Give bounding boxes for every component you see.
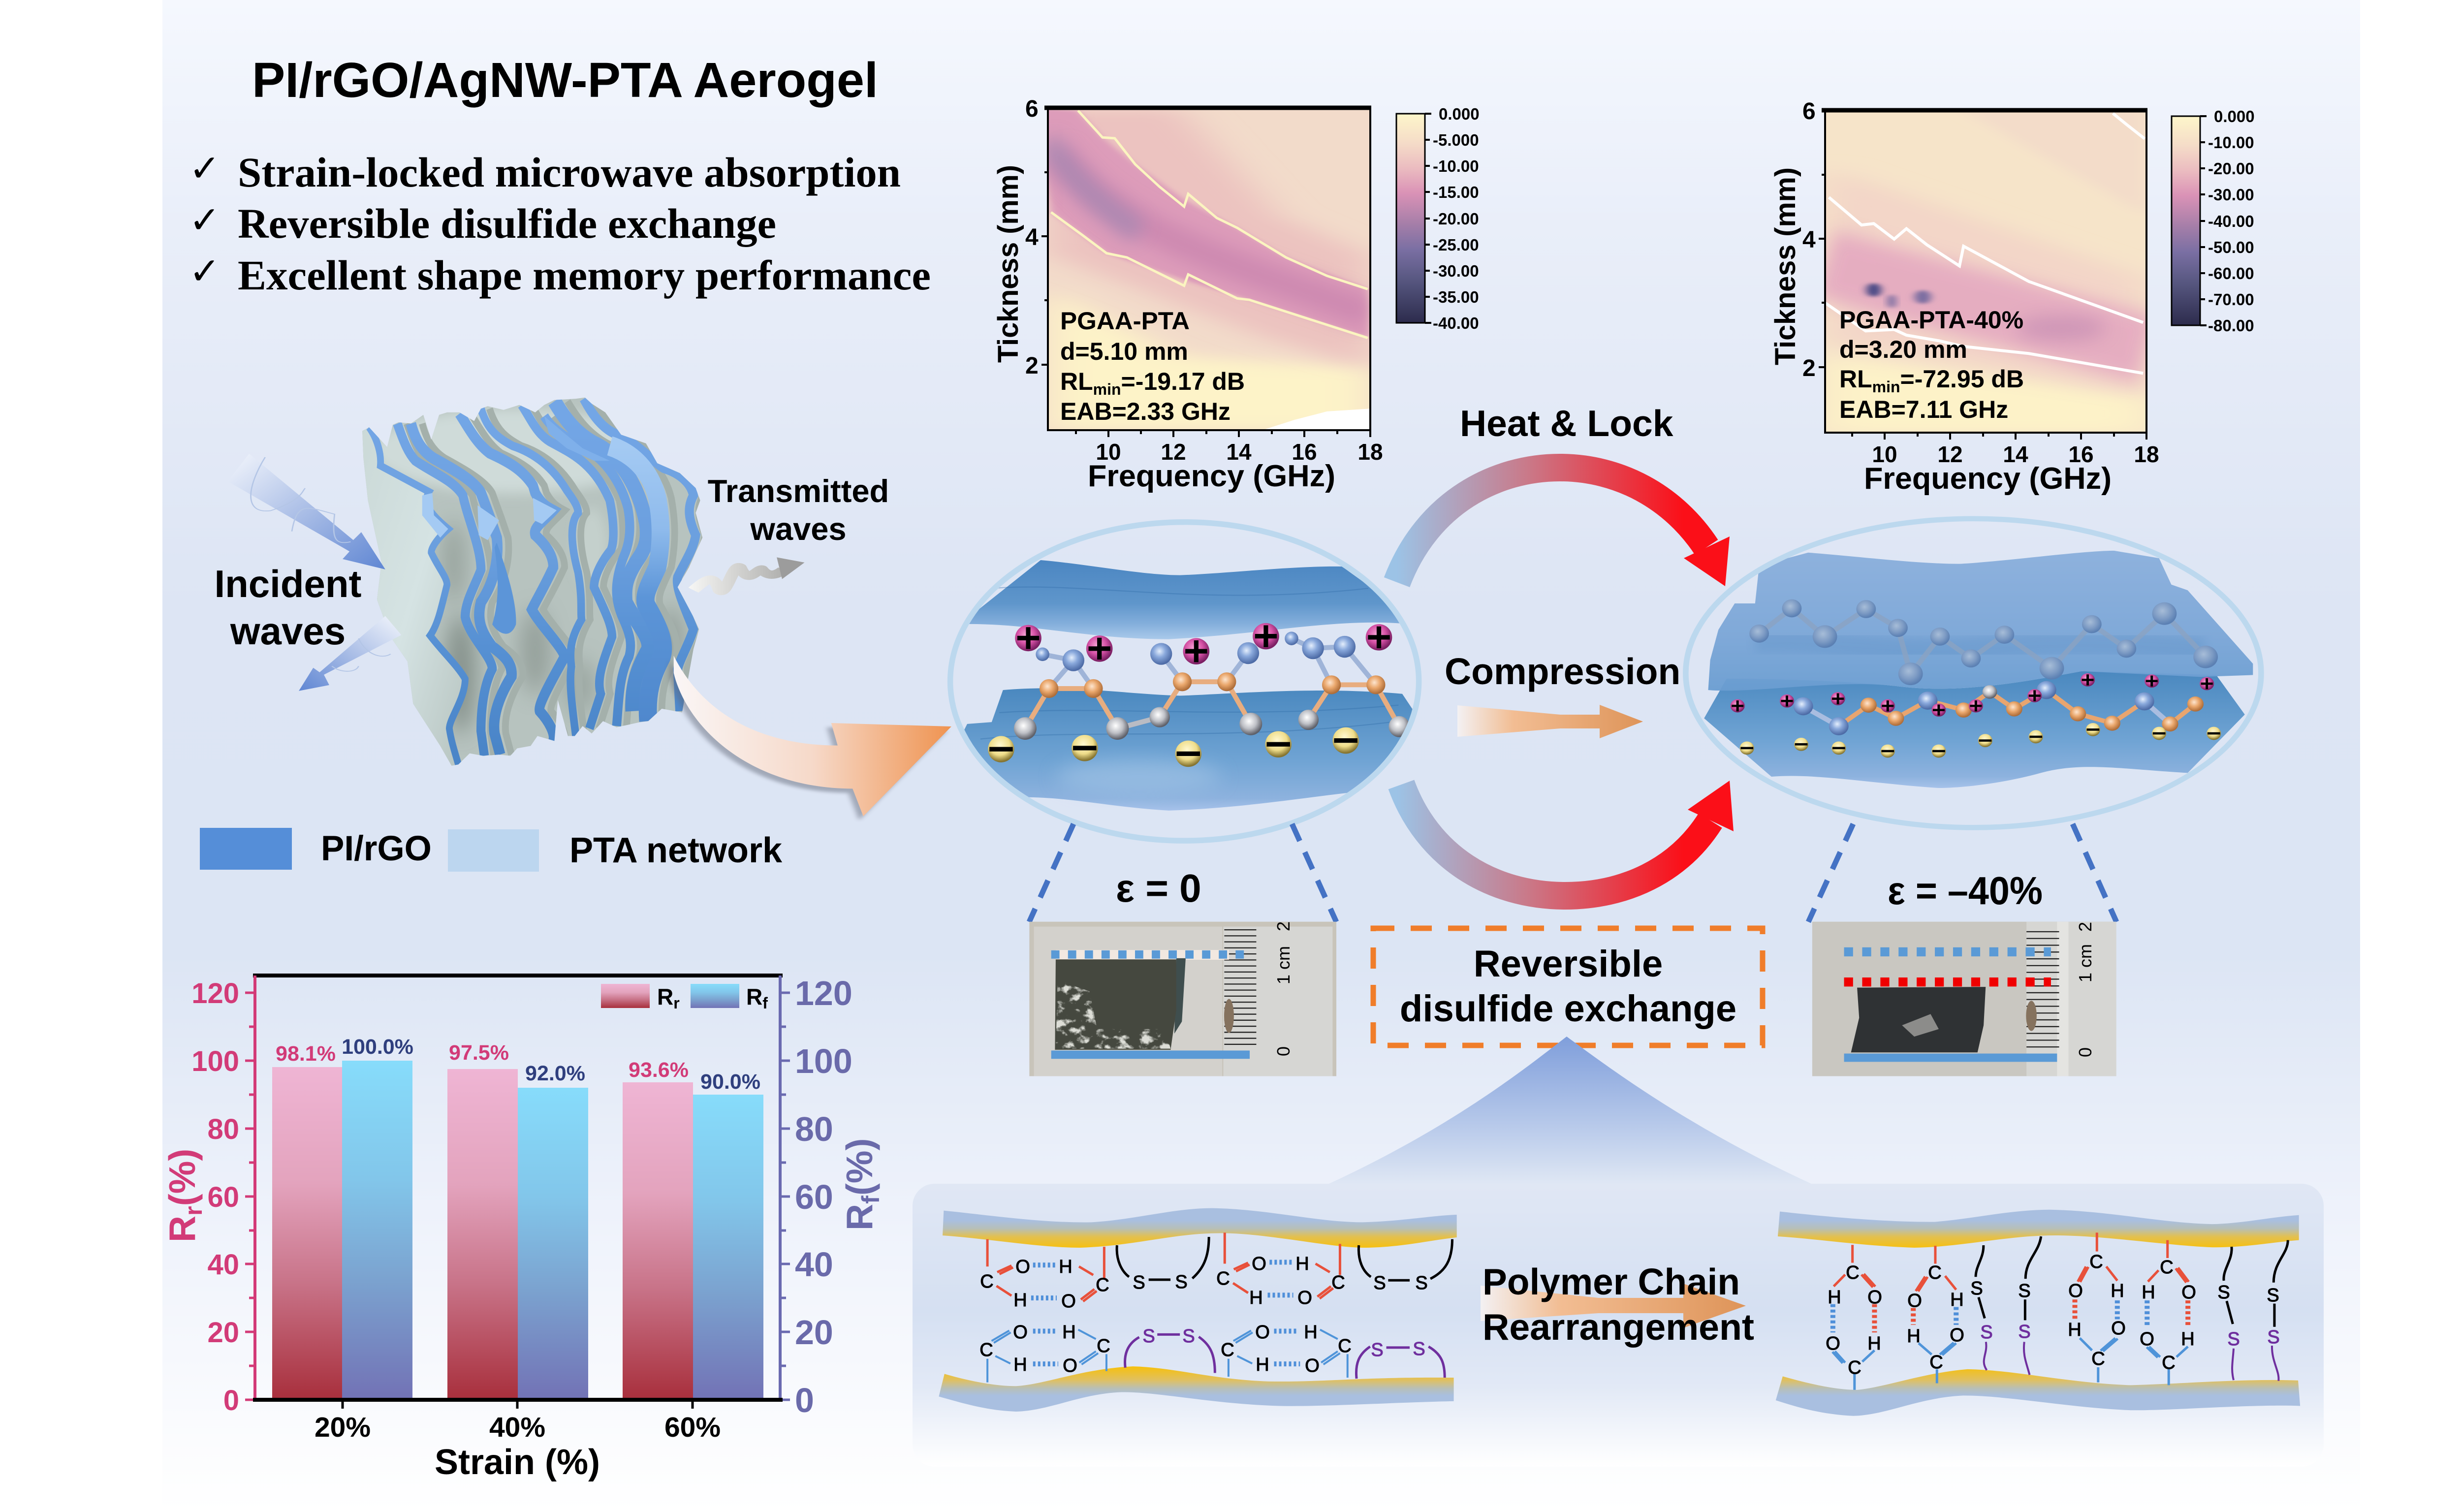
polymer chain: [1025, 638, 1399, 728]
value labels: 100.0%: [342, 1035, 413, 1059]
colorbar: -70.00: [2208, 290, 2254, 309]
heatmap plot area: [1825, 111, 2146, 433]
heatmap frame and ticks: [1819, 110, 2147, 440]
legend: [200, 828, 783, 872]
atom labels: S: [1133, 1272, 1145, 1293]
heatmap x tick labels: 12: [1937, 441, 1963, 467]
atom labels: O: [2140, 1329, 2154, 1350]
heatmap: PGAA-PTA: [992, 96, 1480, 493]
atom labels: S: [1373, 1273, 1386, 1293]
heatmap annotation: RL: [1839, 365, 1872, 393]
heatmap x tick labels: 10: [1096, 439, 1121, 465]
atom labels: H: [1828, 1287, 1841, 1308]
colorbar: -10.00: [1433, 157, 1479, 175]
right axis title: [839, 1138, 884, 1230]
fan connector: [1329, 1037, 1811, 1184]
bullet: reversible disulfide exchange: Reversible disulfide exchange: [238, 200, 776, 247]
value labels: [276, 1035, 760, 1094]
heatmap annotation: =-19.17 dB: [1121, 368, 1245, 395]
colorbar: -50.00: [2208, 238, 2254, 256]
right axis title: R: [839, 1204, 880, 1230]
axes: [245, 976, 790, 1409]
label: incident waves: waves: [230, 609, 346, 653]
atom labels: C: [2162, 1353, 2176, 1373]
atom labels: [1826, 1252, 2280, 1378]
label: transmitted waves: waves: [750, 511, 847, 547]
callout: reversible disulfide exchange: [1373, 928, 1763, 1045]
left schematic: hydrogen and disulfide bonds: [939, 1208, 1457, 1412]
bullet: excellent shape memory performance: ✓: [189, 249, 221, 293]
legend swatch: PTA network: [448, 829, 539, 872]
atom labels: C: [1846, 1262, 1860, 1283]
atom labels: C: [1096, 1275, 1109, 1295]
right axis labels: [795, 974, 852, 1419]
heatmap plot area: [1033, 108, 1370, 430]
atom labels: H: [2111, 1281, 2124, 1301]
callout: reversible disulfide exchange: Reversible: [1474, 943, 1663, 985]
atom labels: C: [2160, 1257, 2174, 1278]
ruler labels: 0: [2075, 1047, 2095, 1057]
negative charges: [988, 727, 1359, 767]
colorbar: -20.00: [1433, 210, 1479, 228]
atom labels: C: [1221, 1340, 1234, 1360]
colorbar: -30.00: [2208, 186, 2254, 204]
left axis labels: 120: [191, 977, 239, 1009]
ruler labels: 1 cm: [1273, 946, 1294, 984]
lower polymer chain: [1794, 681, 2204, 735]
label: incident waves: Incident: [214, 562, 362, 605]
atom labels: C: [980, 1271, 994, 1292]
heatmap annotation: [1839, 306, 2024, 423]
left axis title: (%): [161, 1149, 203, 1206]
heatmap frame and ticks: [1041, 108, 1371, 437]
zoom view: compressed state: [1686, 519, 2261, 827]
colorbar: -15.00: [1433, 183, 1479, 201]
atom labels: O: [1013, 1322, 1028, 1343]
left axis labels: 0: [223, 1385, 239, 1417]
negative charges: [1740, 723, 2221, 757]
x axis labels: 60%: [664, 1412, 721, 1443]
heatmap annotation: PGAA-PTA: [1060, 307, 1190, 335]
heatmap x tick labels: 16: [1292, 439, 1317, 465]
bullet: reversible disulfide exchange: ✓: [189, 198, 221, 242]
x axis title: Frequency (GHz): [1088, 459, 1335, 493]
colorbar: 0.000: [2214, 107, 2255, 126]
chart legend: f: [762, 994, 768, 1012]
x axis labels: [315, 1412, 721, 1443]
atom labels: S: [1175, 1272, 1188, 1292]
colorbar: -80.00: [2208, 316, 2254, 335]
reflected wave arrow: [299, 616, 401, 691]
right axis title: f: [857, 1196, 884, 1204]
left axis labels: 60: [207, 1181, 239, 1213]
chart legend: R: [657, 984, 673, 1009]
bullet: strain-locked microwave absorption: Strain-locked microwave absorption: [238, 149, 901, 196]
grey sheet edges: [407, 399, 705, 756]
arrow: recovery: [1401, 781, 1734, 896]
left axis labels: 80: [207, 1113, 239, 1145]
atom labels: S: [1980, 1322, 1993, 1343]
heatmap y tick labels: 2: [1025, 353, 1039, 379]
heatmap annotation: RL: [1060, 368, 1093, 395]
atom labels: O: [1305, 1355, 1320, 1376]
x axis title: Strain (%): [435, 1443, 600, 1482]
heatmap: PGAA-PTA-40%: [1769, 98, 2255, 496]
heatmap x tick labels: 12: [1161, 439, 1186, 465]
right axis labels: 100: [795, 1042, 852, 1080]
aerogel illustration: [354, 389, 716, 773]
heatmap annotation: EAB=2.33 GHz: [1060, 398, 1230, 425]
atom labels: C: [1097, 1336, 1110, 1356]
atom labels: S: [2227, 1329, 2240, 1350]
left axis title: [161, 1149, 207, 1242]
right axis labels: 120: [795, 974, 852, 1012]
atom labels: S: [1142, 1326, 1155, 1347]
heatmap y tick labels: 6: [1025, 96, 1039, 122]
legend label: PI/rGO: PI/rGO: [321, 829, 432, 868]
colorbar: 0.000: [1439, 105, 1480, 123]
atom labels: O: [1950, 1325, 1964, 1346]
label: polymer chain rearrangement: [1483, 1261, 1754, 1348]
right axis labels: 40: [795, 1245, 833, 1284]
label: polymer chain rearrangement: Polymer Chain: [1483, 1261, 1740, 1302]
bar chart: shape memory: [161, 974, 884, 1482]
atom labels: H: [2142, 1282, 2155, 1303]
atom labels: O: [2181, 1282, 2196, 1303]
atom labels: H: [1907, 1326, 1921, 1347]
ruler labels: [2075, 922, 2095, 1057]
colorbar: -60.00: [2208, 264, 2254, 283]
chart legend: R: [746, 984, 762, 1009]
bullet: excellent shape memory performance: Excellent shape memory performance: [238, 252, 931, 299]
atom labels: C: [1929, 1352, 1943, 1373]
value labels: 93.6%: [629, 1058, 689, 1082]
heatmap annotation: d=3.20 mm: [1839, 336, 1967, 363]
value labels: 97.5%: [449, 1041, 509, 1065]
label: heat and lock: Heat & Lock: [1460, 403, 1673, 444]
blue sheets: [397, 399, 695, 756]
positive charges: [1015, 623, 1392, 664]
atom labels: O: [1255, 1322, 1270, 1343]
heatmap y tick labels: 2: [1802, 355, 1816, 381]
title: PI/rGO/AgNW-PTA Aerogel: [252, 53, 878, 108]
photo: compressed sample: [1812, 922, 2116, 1076]
orange arrow to zoom view: [669, 656, 951, 820]
heatmap y tick labels: 4: [1802, 227, 1816, 253]
strain label: minus forty percent: ε = –40%: [1888, 869, 2043, 913]
atom labels: C: [2091, 1349, 2105, 1369]
x axis labels: 20%: [315, 1412, 371, 1443]
heatmap x tick labels: 18: [1357, 439, 1383, 465]
heatmap annotation: [1060, 307, 1245, 425]
left axis labels: 100: [191, 1045, 239, 1077]
heatmap y tick labels: [1025, 96, 1039, 379]
ruler labels: [1273, 921, 1294, 1056]
atom labels: H: [1950, 1290, 1964, 1310]
atom labels: S: [2267, 1285, 2279, 1306]
atom labels: C: [1928, 1262, 1942, 1283]
atom labels: S: [1371, 1340, 1384, 1360]
ruler labels: 2: [1273, 921, 1294, 931]
bars: 60 percent: [623, 1082, 763, 1400]
atom labels: S: [1182, 1326, 1195, 1347]
right axis labels: 20: [795, 1313, 833, 1352]
heatmap x tick labels: [1872, 441, 2159, 467]
atom labels: O: [1826, 1333, 1840, 1354]
colorbar: -30.00: [1433, 262, 1479, 280]
colorbar: [2172, 107, 2255, 335]
heatmap x tick labels: [1096, 439, 1383, 465]
legend label: PTA network: PTA network: [569, 831, 783, 870]
atom labels: H: [1256, 1354, 1269, 1375]
right axis labels: 80: [795, 1110, 833, 1148]
atom labels: S: [2267, 1327, 2280, 1348]
heatmap x tick labels: 14: [1226, 439, 1252, 465]
atom labels: H: [2181, 1329, 2195, 1350]
atom labels: O: [1061, 1291, 1076, 1312]
strain label: zero: ε = 0: [1116, 866, 1201, 910]
colorbar: -25.00: [1433, 236, 1479, 254]
colorbar: -5.000: [1433, 131, 1479, 149]
heatmap y tick labels: 6: [1802, 98, 1816, 125]
callout: reversible disulfide exchange: disulfide exchange: [1400, 988, 1736, 1030]
heatmap annotation: min: [1093, 380, 1121, 398]
bars: 40 percent: [447, 1069, 588, 1400]
label: transmitted waves: Transmitted: [708, 473, 889, 509]
colorbar: -40.00: [2208, 212, 2254, 230]
value labels: 98.1%: [276, 1042, 336, 1066]
left axis title: r: [180, 1206, 207, 1216]
atom labels: O: [1063, 1355, 1077, 1376]
bullet: strain-locked microwave absorption: ✓: [189, 146, 221, 190]
ruler labels: 0: [1273, 1046, 1294, 1056]
incident wave arrow: [228, 454, 385, 569]
atom labels: H: [1867, 1333, 1881, 1354]
left axis labels: 40: [207, 1249, 239, 1281]
heatmap x tick labels: 18: [2134, 441, 2159, 467]
left axis labels: [191, 977, 239, 1417]
atom labels: C: [1216, 1268, 1230, 1289]
atom labels: O: [1297, 1288, 1312, 1308]
heatmap annotation: min: [1872, 378, 1900, 396]
heatmap annotation: PGAA-PTA-40%: [1839, 306, 2023, 334]
dashed guide lines: right photo: [1808, 824, 2116, 922]
arrow: compression: [1457, 705, 1643, 738]
right axis labels: 0: [795, 1381, 814, 1419]
right schematic: rearranged bonds: [1776, 1210, 2300, 1416]
colorbar: -35.00: [1433, 288, 1479, 306]
arrow: heat and lock: [1397, 468, 1730, 586]
chart legend: [601, 984, 768, 1012]
atom labels: S: [2217, 1282, 2230, 1303]
colorbar: -10.00: [2208, 133, 2254, 152]
atom labels: S: [1413, 1339, 1425, 1359]
left axis title: R: [161, 1216, 203, 1242]
heatmap annotation: =-72.95 dB: [1900, 365, 2024, 393]
x axis labels: 40%: [489, 1412, 545, 1443]
atom labels: O: [1907, 1291, 1922, 1311]
right axis labels: 60: [795, 1178, 833, 1216]
atom labels: H: [1013, 1290, 1027, 1311]
atom labels: H: [1295, 1254, 1309, 1274]
y axis title: Tickness (mm): [1769, 167, 1801, 365]
atom labels: O: [2068, 1281, 2083, 1301]
atom labels: O: [1867, 1287, 1882, 1308]
atom labels: H: [1304, 1322, 1318, 1343]
atom labels: H: [1062, 1322, 1076, 1343]
dashed guide lines: left photo: [1029, 824, 1336, 922]
arrow: rearrangement: [1481, 1284, 1746, 1328]
positive charges: [1731, 673, 2214, 717]
heatmap annotation: d=5.10 mm: [1060, 338, 1188, 365]
atom labels: H: [1249, 1288, 1263, 1308]
value labels: 92.0%: [525, 1062, 585, 1085]
atom labels: C: [2089, 1252, 2103, 1272]
label: compression: Compression: [1445, 651, 1680, 692]
bars: 20 percent: [272, 1061, 412, 1400]
label: transmitted waves: [708, 473, 889, 547]
atom labels: S: [1415, 1273, 1428, 1293]
ruler labels: 1 cm: [2075, 944, 2095, 982]
left axis labels: 20: [207, 1317, 239, 1349]
chart legend: r: [673, 994, 680, 1012]
feature checklist: [189, 146, 931, 299]
ruler labels: 2: [2075, 922, 2095, 932]
atom labels: S: [2018, 1281, 2031, 1301]
label: polymer chain rearrangement: Rearrangement: [1483, 1306, 1754, 1348]
atom labels: C: [1331, 1272, 1345, 1293]
atom labels: [979, 1254, 1428, 1376]
right axis title: (%): [839, 1138, 880, 1196]
panel: polymer chain rearrangement: [913, 1184, 2324, 1467]
atom labels: C: [1848, 1357, 1862, 1378]
atom labels: S: [1970, 1278, 1983, 1299]
atom labels: O: [1252, 1254, 1266, 1274]
atom labels: O: [2111, 1318, 2126, 1339]
atom labels: H: [2068, 1320, 2082, 1340]
atom labels: S: [2018, 1322, 2031, 1342]
heatmap x tick labels: 14: [2003, 441, 2028, 467]
heatmap x tick labels: 16: [2068, 441, 2094, 467]
heatmap x tick labels: 10: [1872, 441, 1897, 467]
transmitted wave arrow: [694, 557, 805, 591]
legend swatch: PI/rGO: [200, 828, 292, 870]
heatmap y tick labels: 4: [1025, 224, 1039, 251]
photo: uncompressed sample: [1029, 921, 1336, 1076]
colorbar: -40.00: [1433, 314, 1479, 332]
x axis title: Frequency (GHz): [1864, 462, 2112, 496]
atom labels: H: [1013, 1354, 1027, 1375]
colorbar: [1396, 105, 1480, 332]
atom labels: H: [1059, 1257, 1073, 1277]
heatmap y tick labels: [1802, 98, 1816, 381]
y axis title: Tickness (mm): [992, 165, 1024, 363]
value labels: 90.0%: [700, 1070, 760, 1094]
atom labels: O: [1015, 1257, 1030, 1277]
upper polymer chain: [1749, 599, 2218, 685]
atom labels: C: [979, 1340, 993, 1360]
zoom view: uncompressed state: [950, 522, 1425, 841]
colorbar: -20.00: [2208, 159, 2254, 178]
label: incident waves: [214, 562, 362, 653]
atom labels: C: [1338, 1336, 1352, 1356]
heatmap annotation: EAB=7.11 GHz: [1839, 396, 2008, 423]
